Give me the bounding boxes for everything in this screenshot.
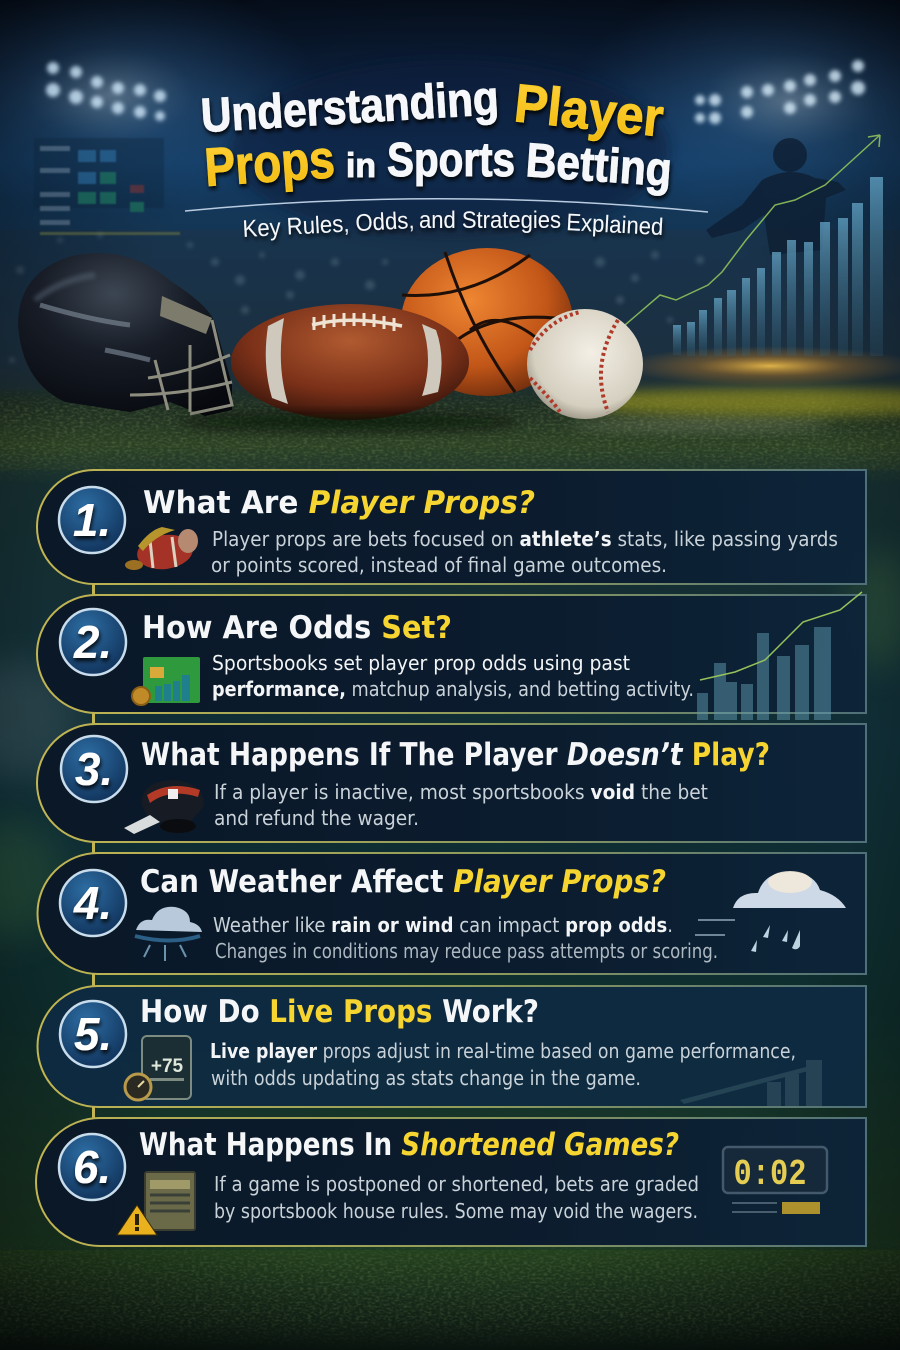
body 6: If a game is postponed or shortened, bets are graded: [214, 1172, 699, 1196]
heading 6: What Happens In Shortened Games?: [139, 1127, 679, 1163]
panel 4: can weather affect player props: [37, 853, 866, 974]
basketball: [401, 248, 573, 396]
title: Props: [203, 129, 337, 198]
number badge 2: [60, 609, 126, 675]
foreground grass: [180, 414, 520, 430]
number badge 5: 5.: [74, 1008, 112, 1060]
helmet: [18, 253, 232, 416]
left odds board: [34, 138, 180, 235]
body 5: with odds updating as stats change in the game.: [211, 1066, 641, 1090]
heading 5: How Do Live Props Work?: [140, 994, 539, 1030]
icon: rain cloud: [135, 907, 202, 961]
body 1: or points scored, instead of final game outcomes.: [211, 553, 667, 577]
connector 1-2: [92, 584, 95, 595]
body 1: Player props are bets focused on athlete’s stats, like passing yards: [212, 527, 838, 551]
title: Understanding: [199, 72, 500, 143]
baseball: [527, 309, 643, 419]
title: Betting: [524, 134, 674, 197]
heading 3: What Happens If The Player Doesn’t Play?: [141, 737, 770, 773]
body 3: If a player is inactive, most sportsbooks void the bet: [214, 780, 708, 804]
weather cloud decoration: [695, 871, 846, 952]
body 1: [211, 527, 838, 577]
subtitle: [242, 207, 664, 243]
subtitle: Explained: [566, 209, 664, 241]
title: Sports: [387, 134, 515, 187]
heading 2: How Are Odds Set?: [142, 610, 452, 646]
player silhouette: [706, 138, 846, 255]
title: [199, 72, 674, 198]
subtitle: Key Rules, Odds,: [242, 207, 415, 243]
number badge 2: 2.: [73, 616, 112, 668]
connector 4-5: [92, 974, 95, 986]
body 6: [214, 1172, 699, 1223]
heading 1: What Are Player Props?: [143, 485, 535, 521]
body 4: Weather like rain or wind can impact prop odds.: [213, 913, 673, 937]
connector 3-4: [92, 842, 95, 853]
stadium floodlights left: [46, 62, 166, 121]
panel 2: how are odds set: [37, 592, 866, 720]
title: Player: [512, 73, 666, 149]
body 3: [214, 780, 708, 830]
number badge 4: [60, 870, 126, 936]
number badge 6: 6.: [73, 1141, 111, 1193]
subtitle: and Strategies: [419, 207, 561, 234]
chart decoration: [697, 592, 862, 720]
connector 2-3: [92, 713, 95, 724]
body 3: and refund the wager.: [214, 806, 419, 830]
rising bar chart: [625, 135, 883, 356]
title divider: [185, 199, 708, 212]
number badge 5: [60, 1001, 126, 1067]
number badge 1: 1.: [73, 494, 111, 546]
faint bars decoration: [680, 1060, 822, 1106]
body 5: Live player props adjust in real-time based on game performance,: [210, 1039, 796, 1063]
number badge 3: 3.: [75, 743, 113, 795]
body 4: Changes in conditions may reduce pass attempts or scoring.: [215, 939, 718, 963]
body 2: [212, 651, 694, 701]
body 5: [210, 1039, 796, 1090]
number badge 3: [61, 736, 127, 802]
icon: scoreboard and warning: [117, 1172, 195, 1235]
game clock: 0:02: [734, 1154, 806, 1195]
connector 5-6: [92, 1107, 95, 1118]
game clock: [723, 1147, 827, 1214]
stadium floodlights right: [695, 60, 865, 124]
icon: football and gear: [125, 527, 198, 573]
icon: live odds phone and stopwatch: [125, 1036, 191, 1100]
number badge 1: [59, 487, 125, 553]
body 2: Sportsbooks set player prop odds using past: [212, 651, 630, 675]
football: [231, 304, 469, 420]
icon: odds card with bars: [132, 657, 200, 705]
panel 1: what are player props: [37, 470, 866, 584]
icon: live odds phone and stopwatch: +75: [151, 1056, 184, 1077]
title: in: [346, 147, 376, 185]
panel 6: what happens in shortened games: [36, 1118, 866, 1246]
panel 5: how do live props work: [37, 986, 866, 1107]
body 4: [213, 913, 718, 963]
number badge 4: 4.: [73, 877, 112, 929]
body 2: performance, matchup analysis, and betting activity.: [212, 677, 694, 701]
number badge 6: [59, 1134, 125, 1200]
body 6: by sportsbook house rules. Some may void the wagers.: [214, 1199, 698, 1223]
panel 3: what happens if the player doesn't play: [37, 724, 866, 842]
heading 4: Can Weather Affect Player Props?: [140, 864, 666, 900]
icon: helmet: [124, 780, 204, 834]
